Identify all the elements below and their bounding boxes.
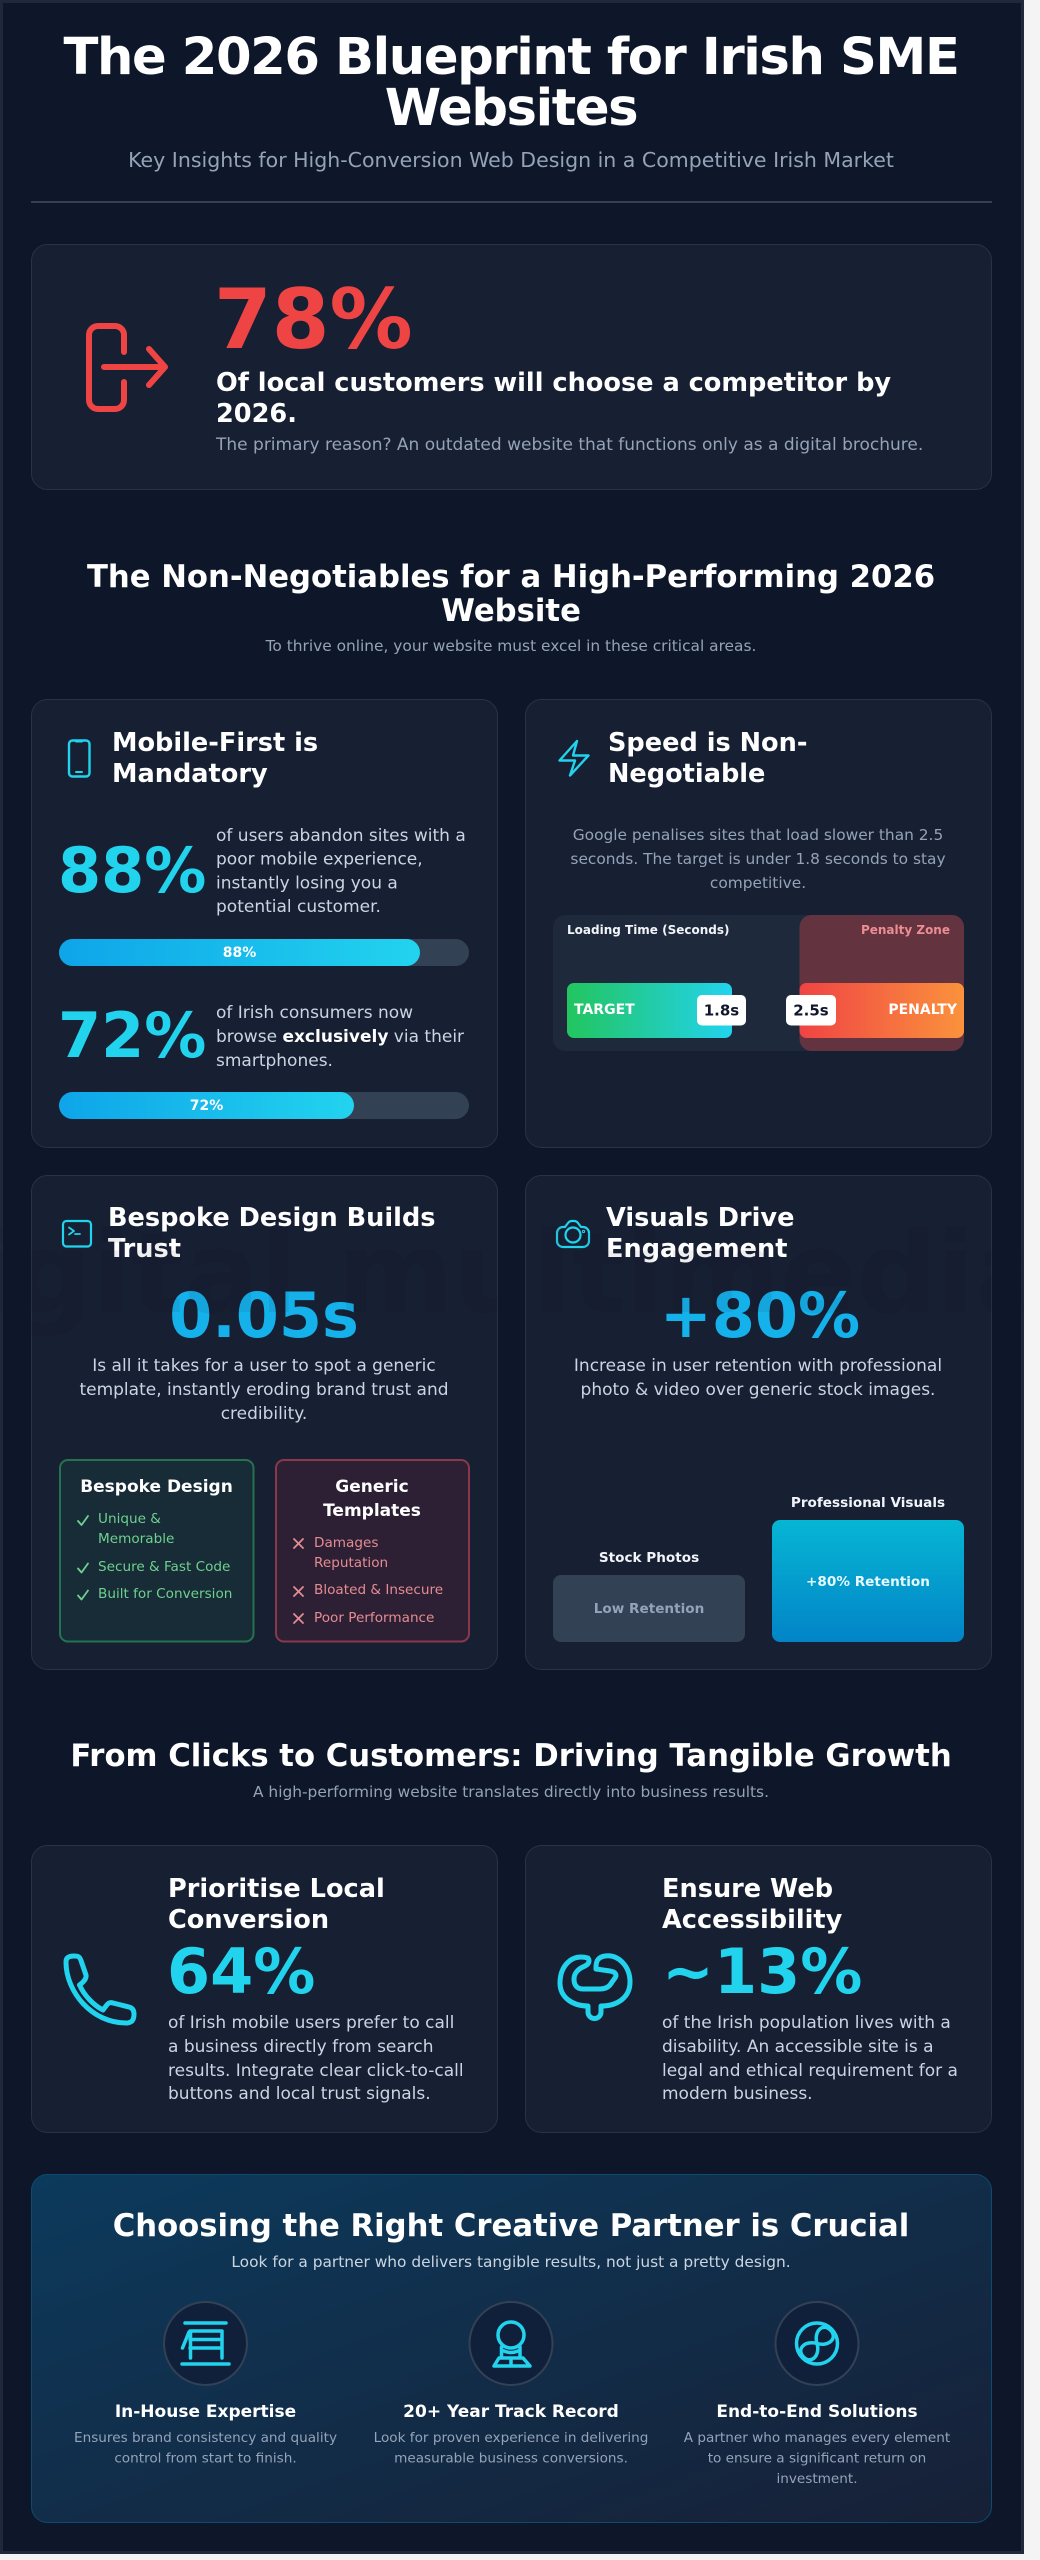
subheading: Look for a partner who delivers tangible results, not just a pretty design.: [231, 2253, 791, 2271]
description: of Irish mobile users prefer to call: [168, 2013, 454, 2033]
heading: Speed is Non-: [608, 728, 807, 758]
icon: accessibility: [560, 1956, 630, 2019]
panel: bespoke design: [32, 1176, 498, 1670]
section heading: clicks to customers: [70, 1739, 952, 1801]
chart: loading time: TARGET: [574, 1002, 635, 1018]
icon: award: [494, 2322, 530, 2366]
description: modern business.: [662, 2084, 813, 2104]
heading: Mobile-First is: [112, 728, 318, 758]
comparison: bespoke: Secure & Fast Code: [98, 1559, 230, 1575]
bar: stock photos: [553, 1550, 745, 1642]
panel: mobile-first: potential customer.: [216, 897, 381, 917]
description: Increase in user retention with professional: [574, 1356, 942, 1376]
subtitle: Key Insights for High-Conversion Web Design in a Competitive Irish Market: [128, 148, 894, 172]
chart: loading time: Loading Time (Seconds): [567, 923, 730, 937]
heading: Conversion: [168, 1905, 329, 1935]
item: end-to-end: A partner who manages every element: [684, 2430, 950, 2446]
panel: creative partner: [32, 2174, 992, 2522]
item: in-house: Ensures brand consistency and quality: [74, 2430, 337, 2446]
comparison: generic: Bloated & Insecure: [314, 1582, 443, 1598]
heading: Negotiable: [608, 759, 765, 789]
panel: visuals: [526, 1176, 992, 1670]
item: in-house: In-House Expertise: [115, 2402, 296, 2422]
comparison: generic: Reputation: [314, 1555, 388, 1571]
panel: mobile-first: poor mobile experience,: [216, 850, 423, 870]
heading: Mandatory: [112, 759, 268, 789]
comparison: bespoke: Built for Conversion: [98, 1586, 232, 1602]
progress bar 88%: 88%: [223, 945, 256, 961]
item: in-house: control from start to finish.: [114, 2450, 297, 2466]
item: track record: 20+ Year Track Record: [403, 2402, 619, 2422]
comparison: generic: Poor Performance: [314, 1610, 434, 1626]
bar: professional visuals: Professional Visuals: [791, 1495, 945, 1511]
description: of the Irish population lives with a: [662, 2013, 951, 2033]
progress bar 88%: [59, 939, 469, 966]
icon: camera: [557, 1221, 589, 1247]
item: end-to-end: to ensure a significant return on: [708, 2450, 926, 2466]
chart: loading time: [553, 915, 964, 1051]
progress bar 72%: [59, 1092, 469, 1119]
section heading: clicks to customers: From Clicks to Customers: Driving Tangible Growth: [70, 1739, 952, 1774]
section heading: non-negotiables: To thrive online, your website must excel in these critical areas.: [265, 637, 756, 655]
panel: mobile-first: of Irish consumers now: [216, 1003, 413, 1023]
panel: mobile-first: [32, 700, 498, 1148]
panel: hero stat: [32, 244, 992, 490]
headline: 2026.: [216, 399, 297, 429]
description: legal and ethical requirement for a: [662, 2061, 958, 2081]
icon: exit door: [89, 326, 165, 409]
item: track record: [374, 2302, 648, 2466]
chart: loading time: Penalty Zone: [861, 923, 950, 937]
stat 88%: 88%: [58, 834, 206, 907]
big number: 0.05s: [169, 1279, 359, 1352]
panel: local conversion: [32, 1846, 498, 2132]
icon: phone: [69, 740, 90, 776]
bar: stock photos: Low Retention: [594, 1601, 704, 1617]
description: disability. An accessible site is a: [662, 2037, 934, 2057]
heading: Accessibility: [662, 1905, 843, 1935]
section heading: clicks to customers: A high-performing website translates directly into business results.: [253, 1783, 769, 1801]
big number: 78%: [214, 271, 413, 368]
description: template, instantly eroding brand trust and: [79, 1380, 449, 1400]
panel: accessibility: [526, 1846, 992, 2132]
bar: stock photos: Stock Photos: [599, 1550, 699, 1566]
description: buttons and local trust signals.: [168, 2084, 431, 2104]
section heading: non-negotiables: [87, 560, 935, 655]
panel: mobile-first: instantly losing you a: [216, 874, 398, 894]
description: competitive.: [710, 874, 806, 892]
bar: professional visuals: +80% Retention: [806, 1574, 930, 1590]
panel: speed: [526, 700, 992, 1148]
badge 2.5s: [786, 995, 836, 1026]
big number: ~13%: [662, 1935, 862, 2008]
description: results. Integrate clear click-to-call: [168, 2061, 464, 2081]
stat 72%: 72%: [58, 999, 206, 1072]
item: end-to-end: End-to-End Solutions: [716, 2402, 918, 2422]
item: end-to-end: [684, 2302, 950, 2487]
section heading: non-negotiables: Website: [441, 594, 581, 629]
heading: Ensure Web: [662, 1874, 833, 1904]
icon: linked circle: [796, 2323, 838, 2364]
description: Google penalises sites that load slower than 2.5: [573, 826, 943, 844]
description: credibility.: [221, 1404, 307, 1424]
panel: mobile-first: browse: [216, 1027, 282, 1047]
icon: stacked layers: [182, 2323, 229, 2364]
title: Websites: [385, 78, 637, 138]
item: end-to-end: investment.: [776, 2471, 858, 2487]
comparison: generic: [276, 1460, 469, 1642]
headline: Of local customers will choose a competitor by: [216, 368, 891, 398]
description: photo & video over generic stock images.: [581, 1380, 935, 1400]
description: Is all it takes for a user to spot a generic: [92, 1356, 436, 1376]
comparison: generic: Damages: [314, 1535, 378, 1551]
comparison: bespoke: [60, 1460, 254, 1642]
comparison: generic: Templates: [323, 1501, 421, 1521]
heading: Trust: [108, 1234, 181, 1264]
icon: phone handset: [66, 1956, 134, 2023]
header: [63, 27, 959, 172]
description: The primary reason? An outdated website that functions only as a digital brochure.: [215, 435, 923, 455]
big number: 64%: [167, 1935, 315, 2008]
panel: mobile-first: exclusively via their: [282, 1027, 464, 1047]
heading: Prioritise Local: [168, 1874, 385, 1904]
bar: professional visuals: [772, 1495, 964, 1642]
heading: Choosing the Right Creative Partner is Crucial: [113, 2209, 909, 2244]
badge 1.8s: [697, 995, 746, 1026]
item: track record: measurable business conversions.: [394, 2450, 628, 2466]
heading: Visuals Drive: [606, 1203, 794, 1233]
icon: terminal: [63, 1221, 91, 1246]
section heading: non-negotiables: The Non-Negotiables for a High-Performing 2026: [87, 560, 935, 595]
comparison: bespoke: Bespoke Design: [80, 1477, 233, 1497]
description: seconds. The target is under 1.8 seconds to stay: [570, 850, 946, 868]
icon: lightning bolt: [560, 741, 588, 776]
heading: Bespoke Design Builds: [108, 1203, 436, 1233]
comparison: bespoke: Memorable: [98, 1531, 174, 1547]
comparison: generic: Generic: [335, 1477, 409, 1497]
progress bar 72%: 72%: [190, 1098, 223, 1114]
item: in-house: [74, 2302, 337, 2466]
chart: loading time: PENALTY: [888, 1002, 958, 1018]
badge 1.8s: 1.8s: [704, 1002, 739, 1020]
description: a business directly from search: [168, 2037, 434, 2057]
big number: +80%: [660, 1279, 860, 1352]
comparison: bespoke: Unique &: [98, 1511, 161, 1527]
heading: Engagement: [606, 1234, 787, 1264]
panel: mobile-first: smartphones.: [216, 1051, 333, 1071]
panel: mobile-first: of users abandon sites with a: [216, 826, 466, 846]
badge 2.5s: 2.5s: [793, 1002, 829, 1020]
title: The 2026 Blueprint for Irish SME: [63, 27, 959, 87]
item: track record: Look for proven experience in delivering: [374, 2430, 648, 2446]
